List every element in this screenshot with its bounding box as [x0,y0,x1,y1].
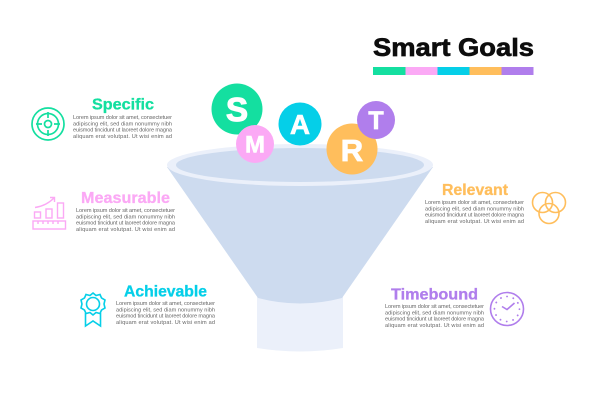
letter circle S: S [226,91,248,128]
icon: target [32,108,64,140]
letter circle M: M [245,132,265,158]
icon: clock [490,292,524,326]
title: Smart Goals [373,34,534,62]
funnel [167,144,433,352]
icon: growth chart [33,198,66,229]
heading: Timebound: Timebound [391,286,478,304]
body text: Specific: euismod tincidunt ut laoreet dolore magna [73,128,173,134]
letter circle T [357,101,395,139]
body text: Measurable [76,208,176,233]
body text: Timebound [385,304,485,329]
body text: Specific [73,115,173,140]
letter circle R: R [341,133,363,168]
body text: Relevant [425,200,525,225]
heading: Achievable: Achievable [124,284,207,300]
letter circle A [278,102,322,146]
body text: Achievable [116,301,216,326]
body text: Relevant: adipiscing elit, sed diam nonummy nibh [425,206,524,212]
funnel rim [167,144,433,186]
body text: Relevant: Lorem ipsum dolor sit amet, consectetuer [425,200,524,206]
heading: Relevant: Relevant [442,182,509,199]
block: Timebound [385,286,485,329]
body text: Achievable: aliquam erat volutpat. Ut wisi enim ad [116,320,215,326]
body text: Timebound: aliquam erat volutpat. Ut wisi enim ad [385,323,484,329]
body text: Relevant: euismod tincidunt ut laoreet dolore magna [425,213,525,219]
letter circle T: T [368,107,384,135]
body text: Achievable: euismod tincidunt ut laoreet dolore magna [116,314,216,320]
letter circle R [326,124,378,174]
funnel opening [176,148,424,182]
letter circle M [236,125,274,163]
heading: Specific: Specific [92,96,154,114]
body text: Measurable: aliquam erat volutpat. Ut wisi enim ad [76,227,175,233]
letter circle A: A [290,109,310,140]
block: Achievable [116,284,216,326]
block: Relevant [425,182,525,225]
block: Measurable [76,190,176,233]
letter circle S [212,84,262,134]
icon: award badge [81,293,105,326]
body text: Relevant: aliquam erat volutpat. Ut wisi enim ad [425,219,524,225]
body text: Measurable: adipiscing elit, sed diam nonummy nibh [76,214,175,220]
body text: Specific: adipiscing elit, sed diam nonummy nibh [73,121,172,127]
body text: Specific: Lorem ipsum dolor sit amet, consectetuer [73,115,172,121]
body text: Measurable: Lorem ipsum dolor sit amet, consectetuer [76,208,175,214]
block: Specific [73,96,173,140]
title colour bar [373,67,534,75]
body text: Achievable: Lorem ipsum dolor sit amet, consectetuer [116,301,215,307]
body text: Achievable: adipiscing elit, sed diam nonummy nibh [116,307,215,313]
body text: Timebound: euismod tincidunt ut laoreet dolore magna [385,317,485,323]
body text: Timebound: Lorem ipsum dolor sit amet, consectetuer [385,304,484,310]
funnel neck [257,296,343,352]
funnel cone [167,167,433,304]
icon: venn diagram [532,192,566,224]
heading: Measurable: Measurable [81,190,170,207]
body text: Specific: aliquam erat volutpat. Ut wisi enim ad [73,134,172,140]
body text: Measurable: euismod tincidunt ut laoreet dolore magna [76,221,176,227]
body text: Timebound: adipiscing elit, sed diam nonummy nibh [385,310,484,316]
